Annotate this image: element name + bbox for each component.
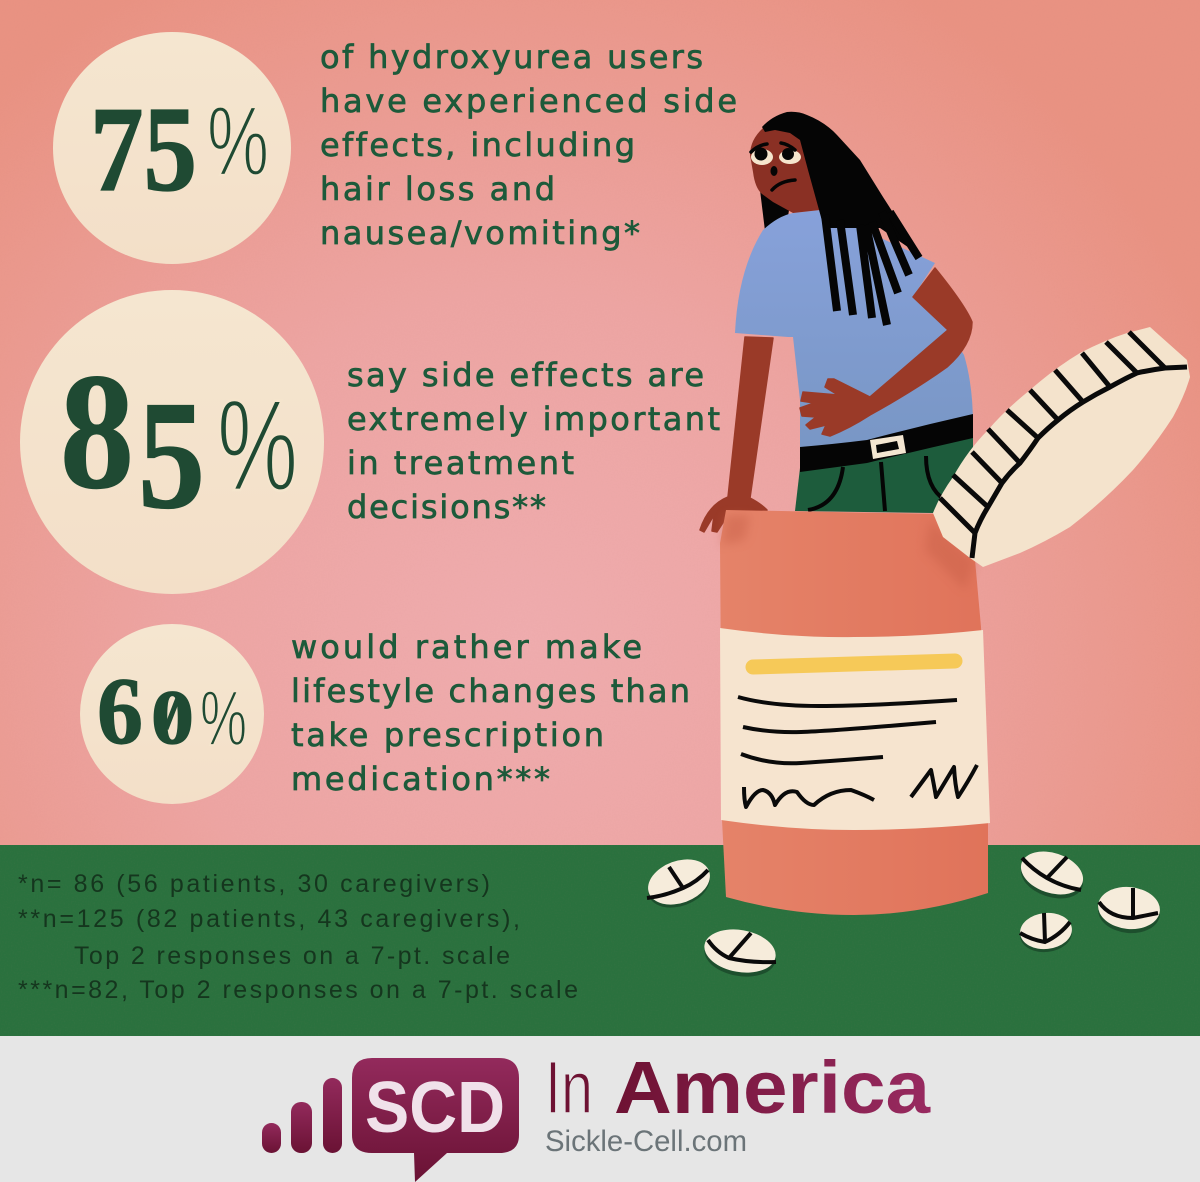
text: 75% description: have experienced side	[320, 82, 737, 120]
logo speech bubble	[352, 1058, 519, 1182]
footer band	[0, 1036, 1200, 1182]
brows, nose, mouth	[751, 143, 795, 190]
logo In: In	[545, 1046, 593, 1129]
stat: 60% circle	[80, 624, 264, 804]
bottle label	[720, 628, 990, 830]
left arm	[700, 337, 773, 534]
pills scattered on table	[642, 844, 1162, 982]
pill 2	[701, 924, 779, 982]
stat: 85% circle: %	[217, 372, 298, 518]
text: 85% description: decisions**	[347, 488, 546, 526]
illustration: bottle cap	[933, 327, 1190, 567]
eyes	[751, 149, 773, 165]
stat: 60% circle: %	[200, 674, 247, 762]
stat: 60% circle: 6	[97, 658, 143, 764]
text: 85% description: extremely important	[347, 400, 720, 438]
logo America: America	[614, 1046, 931, 1129]
pill 5	[1018, 910, 1074, 955]
text: 75% description: effects, including	[320, 126, 635, 164]
footnotes: *n= 86 (56 patients, 30 caregivers)	[18, 870, 490, 898]
pill 1	[642, 851, 716, 916]
hair behind neck	[760, 190, 790, 231]
label writing	[738, 697, 977, 807]
stat: 85% circle: 5	[138, 369, 205, 541]
text: 85% description: in treatment	[347, 444, 574, 482]
stat: 85% circle: 8	[60, 339, 134, 523]
background: pink wall	[0, 0, 1200, 846]
face and neck	[750, 125, 820, 213]
shirt	[735, 210, 973, 458]
stat: 75% circle: %	[207, 86, 269, 196]
logo url: Sickle-Cell.com	[545, 1125, 747, 1158]
logo SCD letters: SCD	[365, 1068, 505, 1148]
footnotes: Top 2 responses on a 7-pt. scale	[74, 942, 510, 970]
footnotes	[18, 870, 578, 1004]
text: 85% description	[347, 356, 720, 526]
stat: 75% circle	[53, 32, 291, 264]
illustration: pill bottle	[720, 510, 990, 915]
logo: SCD In America	[262, 1046, 931, 1182]
cap ridges	[940, 332, 1187, 558]
background: green table	[0, 845, 1200, 1036]
belt buckle	[870, 435, 906, 459]
bottle body	[720, 510, 988, 915]
text: 60% description: medication***	[291, 760, 550, 798]
logo signal bars	[262, 1078, 342, 1153]
stat: 75% circle: 75	[90, 82, 197, 217]
hair strands	[825, 212, 919, 325]
text: 60% description: lifestyle changes than	[291, 672, 690, 710]
illustration: worried person	[700, 112, 973, 534]
stat: 60% circle: 0	[151, 674, 194, 760]
hair	[762, 112, 921, 256]
stat: 85% circle	[20, 290, 324, 594]
text: 60% description: would rather make	[291, 628, 642, 666]
right arm and hand	[800, 268, 972, 436]
text: 75% description: hair loss and	[320, 170, 555, 208]
text: 85% description: say side effects are	[347, 356, 704, 394]
text: 75% description: nausea/vomiting*	[320, 214, 640, 252]
label yellow bar	[753, 661, 955, 667]
text: 60% description	[291, 628, 690, 798]
pill 3	[1015, 844, 1089, 906]
text: 75% description: of hydroxyurea users	[320, 38, 703, 76]
belt	[800, 414, 973, 472]
pill 4	[1096, 884, 1162, 936]
footnotes: ***n=82, Top 2 responses on a 7-pt. scale	[18, 976, 578, 1004]
pants	[795, 436, 973, 513]
text: 75% description	[320, 38, 737, 252]
text: 60% description: take prescription	[291, 716, 604, 754]
footnotes: **n=125 (82 patients, 43 caregivers),	[18, 905, 520, 933]
hand and lid shadow on bottle	[722, 515, 975, 590]
